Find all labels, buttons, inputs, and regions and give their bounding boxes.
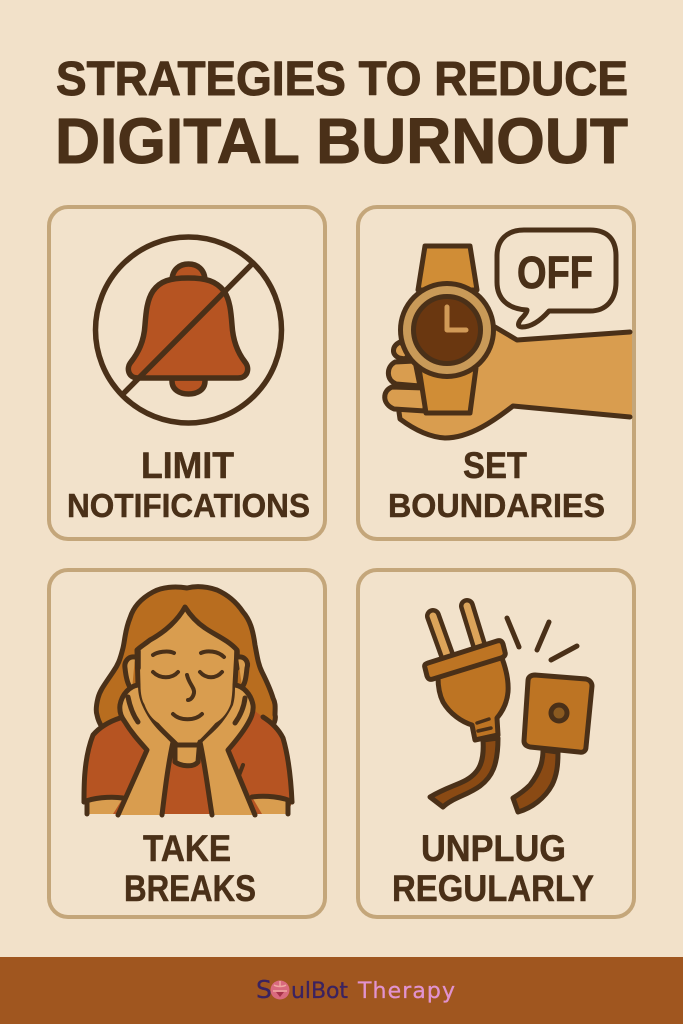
panel: set boundaries — [358, 207, 634, 539]
logo: SoulBot Therapy: Therapy — [357, 979, 455, 1004]
panel: unplug regularly — [358, 570, 634, 917]
label: limit notifications: LIMIT — [141, 445, 234, 486]
logo: SoulBot Therapy: ulBot — [291, 979, 348, 1004]
panel: limit notifications — [49, 207, 325, 539]
label: take breaks: TAKE — [143, 828, 231, 869]
label: set boundaries — [388, 445, 605, 525]
logo: SoulBot Therapy: S — [256, 975, 272, 1004]
label: set boundaries: BOUNDARIES — [388, 488, 605, 525]
title: DIGITAL BURNOUT — [55, 105, 628, 177]
label: limit notifications — [67, 445, 310, 525]
icon: speech bubble OFF: OFF — [517, 247, 593, 298]
logo: SoulBot Therapy — [256, 975, 455, 1004]
label: unplug regularly: UNPLUG — [421, 828, 566, 869]
label: unplug regularly: REGULARLY — [392, 868, 594, 909]
icon: plug and socket — [425, 606, 592, 812]
icon: resting person — [84, 587, 292, 815]
label: take breaks: BREAKS — [124, 868, 256, 909]
label: limit notifications: NOTIFICATIONS — [67, 488, 310, 525]
label: take breaks — [124, 828, 256, 909]
title: STRATEGIES TO REDUCE — [56, 53, 628, 106]
icon: arm and wristwatch — [385, 246, 632, 438]
icon: speech bubble OFF — [497, 230, 616, 327]
label: unplug regularly — [392, 828, 594, 909]
panel: take breaks — [49, 570, 325, 917]
icon: crossed-out bell — [96, 237, 282, 423]
label: set boundaries: SET — [463, 445, 527, 486]
footer band — [0, 957, 683, 1024]
title — [55, 53, 628, 177]
